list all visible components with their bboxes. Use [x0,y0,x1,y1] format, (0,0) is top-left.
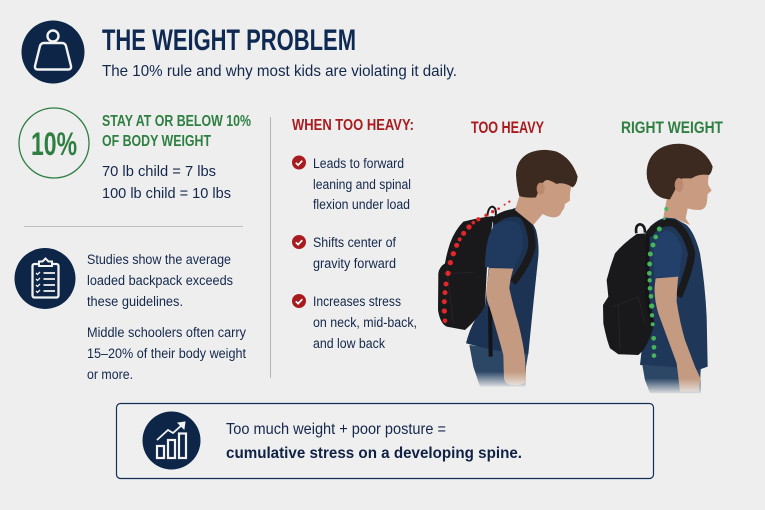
text: studies: loaded backpack exceeds [87,273,233,288]
figure: boy leaning forward with heavy backpack [438,150,578,388]
text: bullet 3: and low back [313,336,385,351]
text: middle schoolers [87,325,246,382]
callout: cumulative stress [116,404,654,478]
figure: boy standing upright with light backpack [603,144,713,395]
icon: red check 3 [292,294,306,308]
label: too heavy: TOO HEAVY [471,118,544,137]
text: bullet 1: leaning and spinal [313,177,411,192]
text: callout message: Too much weight + poor posture = [226,421,446,438]
text: bullet 2 [313,235,396,271]
heading: stay at or below 10%: STAY AT OR BELOW 10% [102,113,251,130]
text: studies [87,252,233,309]
title: THE WEIGHT PROBLEM [102,24,356,57]
icon: clipboard checklist [14,248,76,309]
text: middle schoolers: Middle schoolers often carry [87,325,246,340]
badge: 10%: 10% [31,126,77,162]
text: bullet 2: gravity forward [313,256,396,271]
icon: kettlebell weight [22,20,84,84]
text: weight examples: 100 lb child = 10 lbs [102,185,231,202]
text: bullet 3: on neck, mid-back, [313,315,417,330]
icon: rising bar chart [142,412,200,470]
text: bullet 3 [313,294,417,351]
text: bullet 2: Shifts center of [313,235,396,250]
text: middle schoolers: or more. [87,367,133,382]
text: studies: Studies show the average [87,252,231,267]
icon: red check 1 [292,156,306,170]
text: bullet 1: Leads to forward [313,156,404,171]
text: callout message [226,421,522,462]
text: bullet 3: Increases stress [313,294,401,309]
text: weight examples: 70 lb child = 7 lbs [102,163,216,180]
text: studies: these guidelines. [87,294,183,309]
subtitle: The 10% rule and why most kids are violating it daily. [102,63,457,80]
text: callout message: cumulative stress on a developing spine. [226,445,522,462]
heading: when too heavy: WHEN TOO HEAVY: [292,117,414,134]
heading: stay at or below 10% [102,113,251,150]
text: weight examples [102,163,231,202]
text: middle schoolers: 15–20% of their body weight [87,346,246,361]
label: right weight: RIGHT WEIGHT [621,118,723,137]
heading: stay at or below 10%: OF BODY WEIGHT [102,133,211,150]
icon: red check 2 [292,235,306,249]
badge: 10% [19,108,89,178]
text: bullet 1: flexion under load [313,197,410,212]
text: bullet 1 [313,156,411,212]
